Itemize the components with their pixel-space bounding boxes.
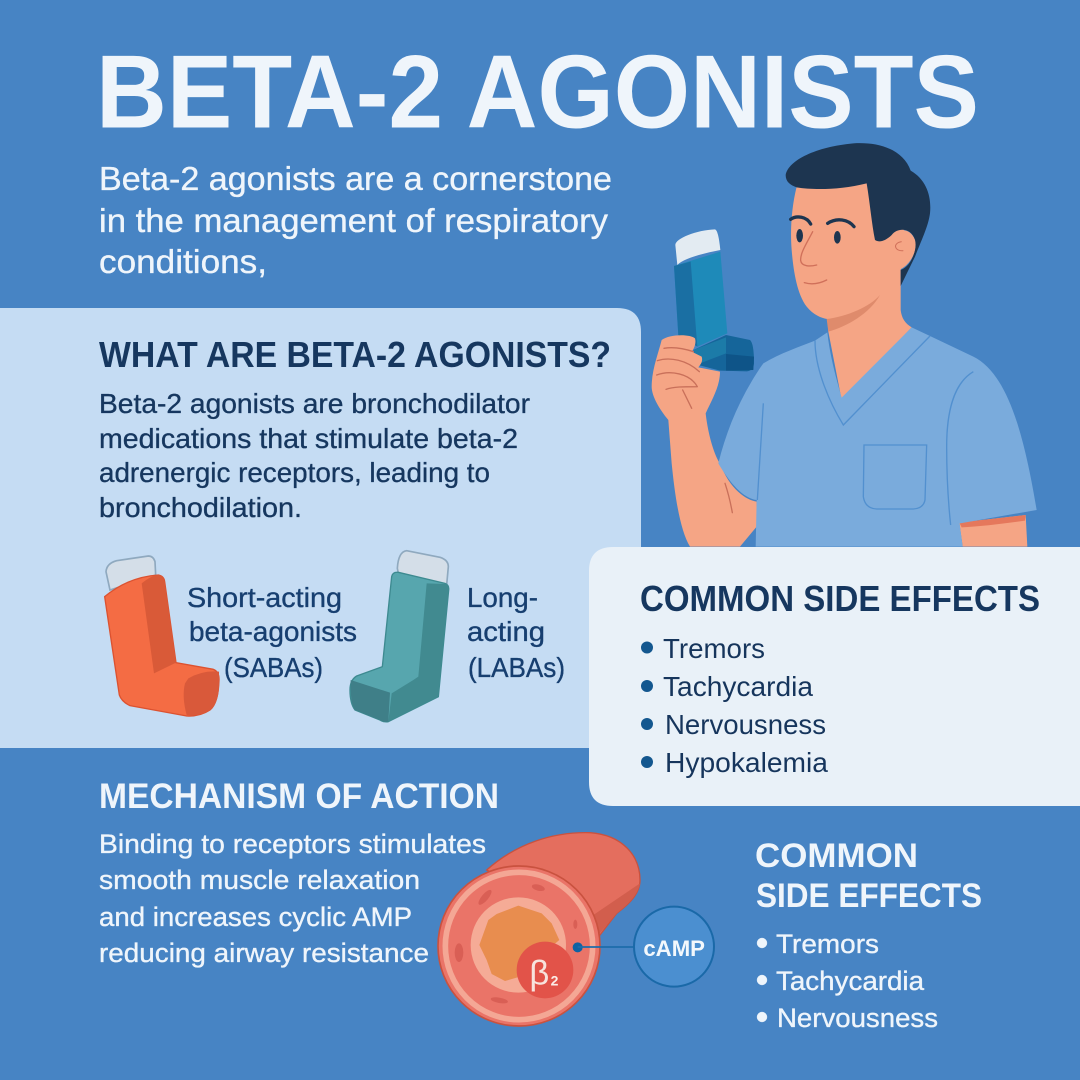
panel body text: medications that stimulate beta-2 [99, 423, 518, 454]
side effects list [641, 633, 828, 778]
secondary side effects heading [755, 837, 982, 915]
secondary side effects list: Nervousness [777, 1003, 938, 1033]
panel heading: WHAT ARE BETA-2 AGONISTS? [99, 334, 611, 375]
title: BETA-2 AGONISTS [96, 34, 979, 150]
airway tube [487, 833, 640, 935]
mechanism of action body text: smooth muscle relaxation [99, 865, 420, 895]
label: LABAs: acting [467, 616, 545, 647]
icon: orange SABA inhaler [105, 556, 219, 716]
secondary side effects heading: SIDE EFFECTS [756, 877, 982, 915]
intro text block: in the management of respiratory [99, 202, 609, 239]
cAMP circle: cAMP [643, 936, 705, 961]
beta-2 receptor [517, 942, 573, 998]
side effects list: Tachycardia [663, 671, 813, 702]
mechanism of action body text: and increases cyclic AMP [99, 902, 412, 932]
secondary side effects heading: COMMON [755, 837, 918, 875]
cAMP circle [634, 907, 714, 987]
label: LABAs: (LABAs) [468, 652, 565, 683]
icon: teal LABA inhaler [350, 551, 449, 722]
scrub shirt [718, 327, 1037, 547]
secondary side effects list: Tachycardia [776, 966, 925, 996]
connector line [573, 942, 634, 952]
beta-2 receptor: 2 [551, 972, 559, 988]
arm and hand [652, 335, 757, 547]
panel: what are beta-2 agonists [0, 308, 641, 748]
panel: common side effects [589, 547, 1080, 806]
diagram: airway cross-section with beta-2 receptor [438, 833, 714, 1026]
airway cross-section [438, 866, 600, 1026]
intro text block: Beta-2 agonists are a cornerstone [99, 160, 612, 197]
label: SABAs [187, 582, 357, 683]
inhaler held by man [674, 229, 754, 371]
illustration: man using inhaler [652, 143, 1037, 547]
side effects heading: COMMON SIDE EFFECTS [640, 578, 1040, 619]
side effects list: Hypokalemia [665, 747, 828, 778]
label: SABAs: (SABAs) [224, 652, 323, 683]
panel body text: bronchodilation. [99, 492, 302, 523]
mechanism of action body text: Binding to receptors stimulates [99, 829, 486, 859]
side effects list: Tremors [663, 633, 765, 664]
intro text block [99, 160, 612, 280]
ear [892, 230, 916, 271]
secondary side effects list: Tremors [776, 929, 879, 959]
right forearm [959, 515, 1027, 547]
face and neck [791, 180, 912, 400]
panel body text [99, 388, 530, 523]
facial features [791, 217, 854, 284]
label: SABAs: Short-acting [187, 582, 342, 613]
label: SABAs: beta-agonists [189, 616, 357, 647]
mechanism of action heading: MECHANISM OF ACTION [99, 777, 499, 816]
panel body text: Beta-2 agonists are bronchodilator [99, 388, 530, 419]
intro text block: conditions, [99, 243, 267, 280]
beta-2 receptor: β [529, 955, 549, 993]
mechanism of action body text [99, 829, 486, 968]
label: LABAs: Long- [467, 582, 538, 613]
panel body text: adrenergic receptors, leading to [99, 457, 490, 488]
hair [786, 143, 930, 286]
side effects list: Nervousness [665, 709, 826, 740]
label: LABAs [467, 582, 565, 683]
secondary side effects list [757, 929, 938, 1033]
mechanism of action body text: reducing airway resistance [99, 938, 429, 968]
